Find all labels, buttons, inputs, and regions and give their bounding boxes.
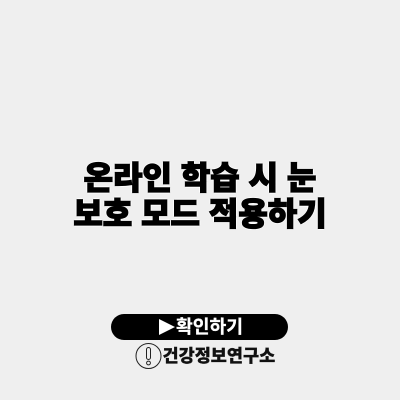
icon: play triangle bbox=[159, 319, 175, 335]
button: confirm bbox=[111, 314, 288, 340]
brand logo bbox=[136, 343, 275, 369]
title line 2: 보호 모드 적용하기 bbox=[73, 196, 327, 232]
icon: exclamation circle bbox=[136, 343, 162, 369]
brand name: 건강정보연구소 bbox=[162, 346, 275, 366]
button label: 확인하기 bbox=[176, 317, 243, 337]
title bbox=[73, 160, 327, 232]
title line 1: 온라인 학습 시 눈 bbox=[84, 160, 316, 196]
